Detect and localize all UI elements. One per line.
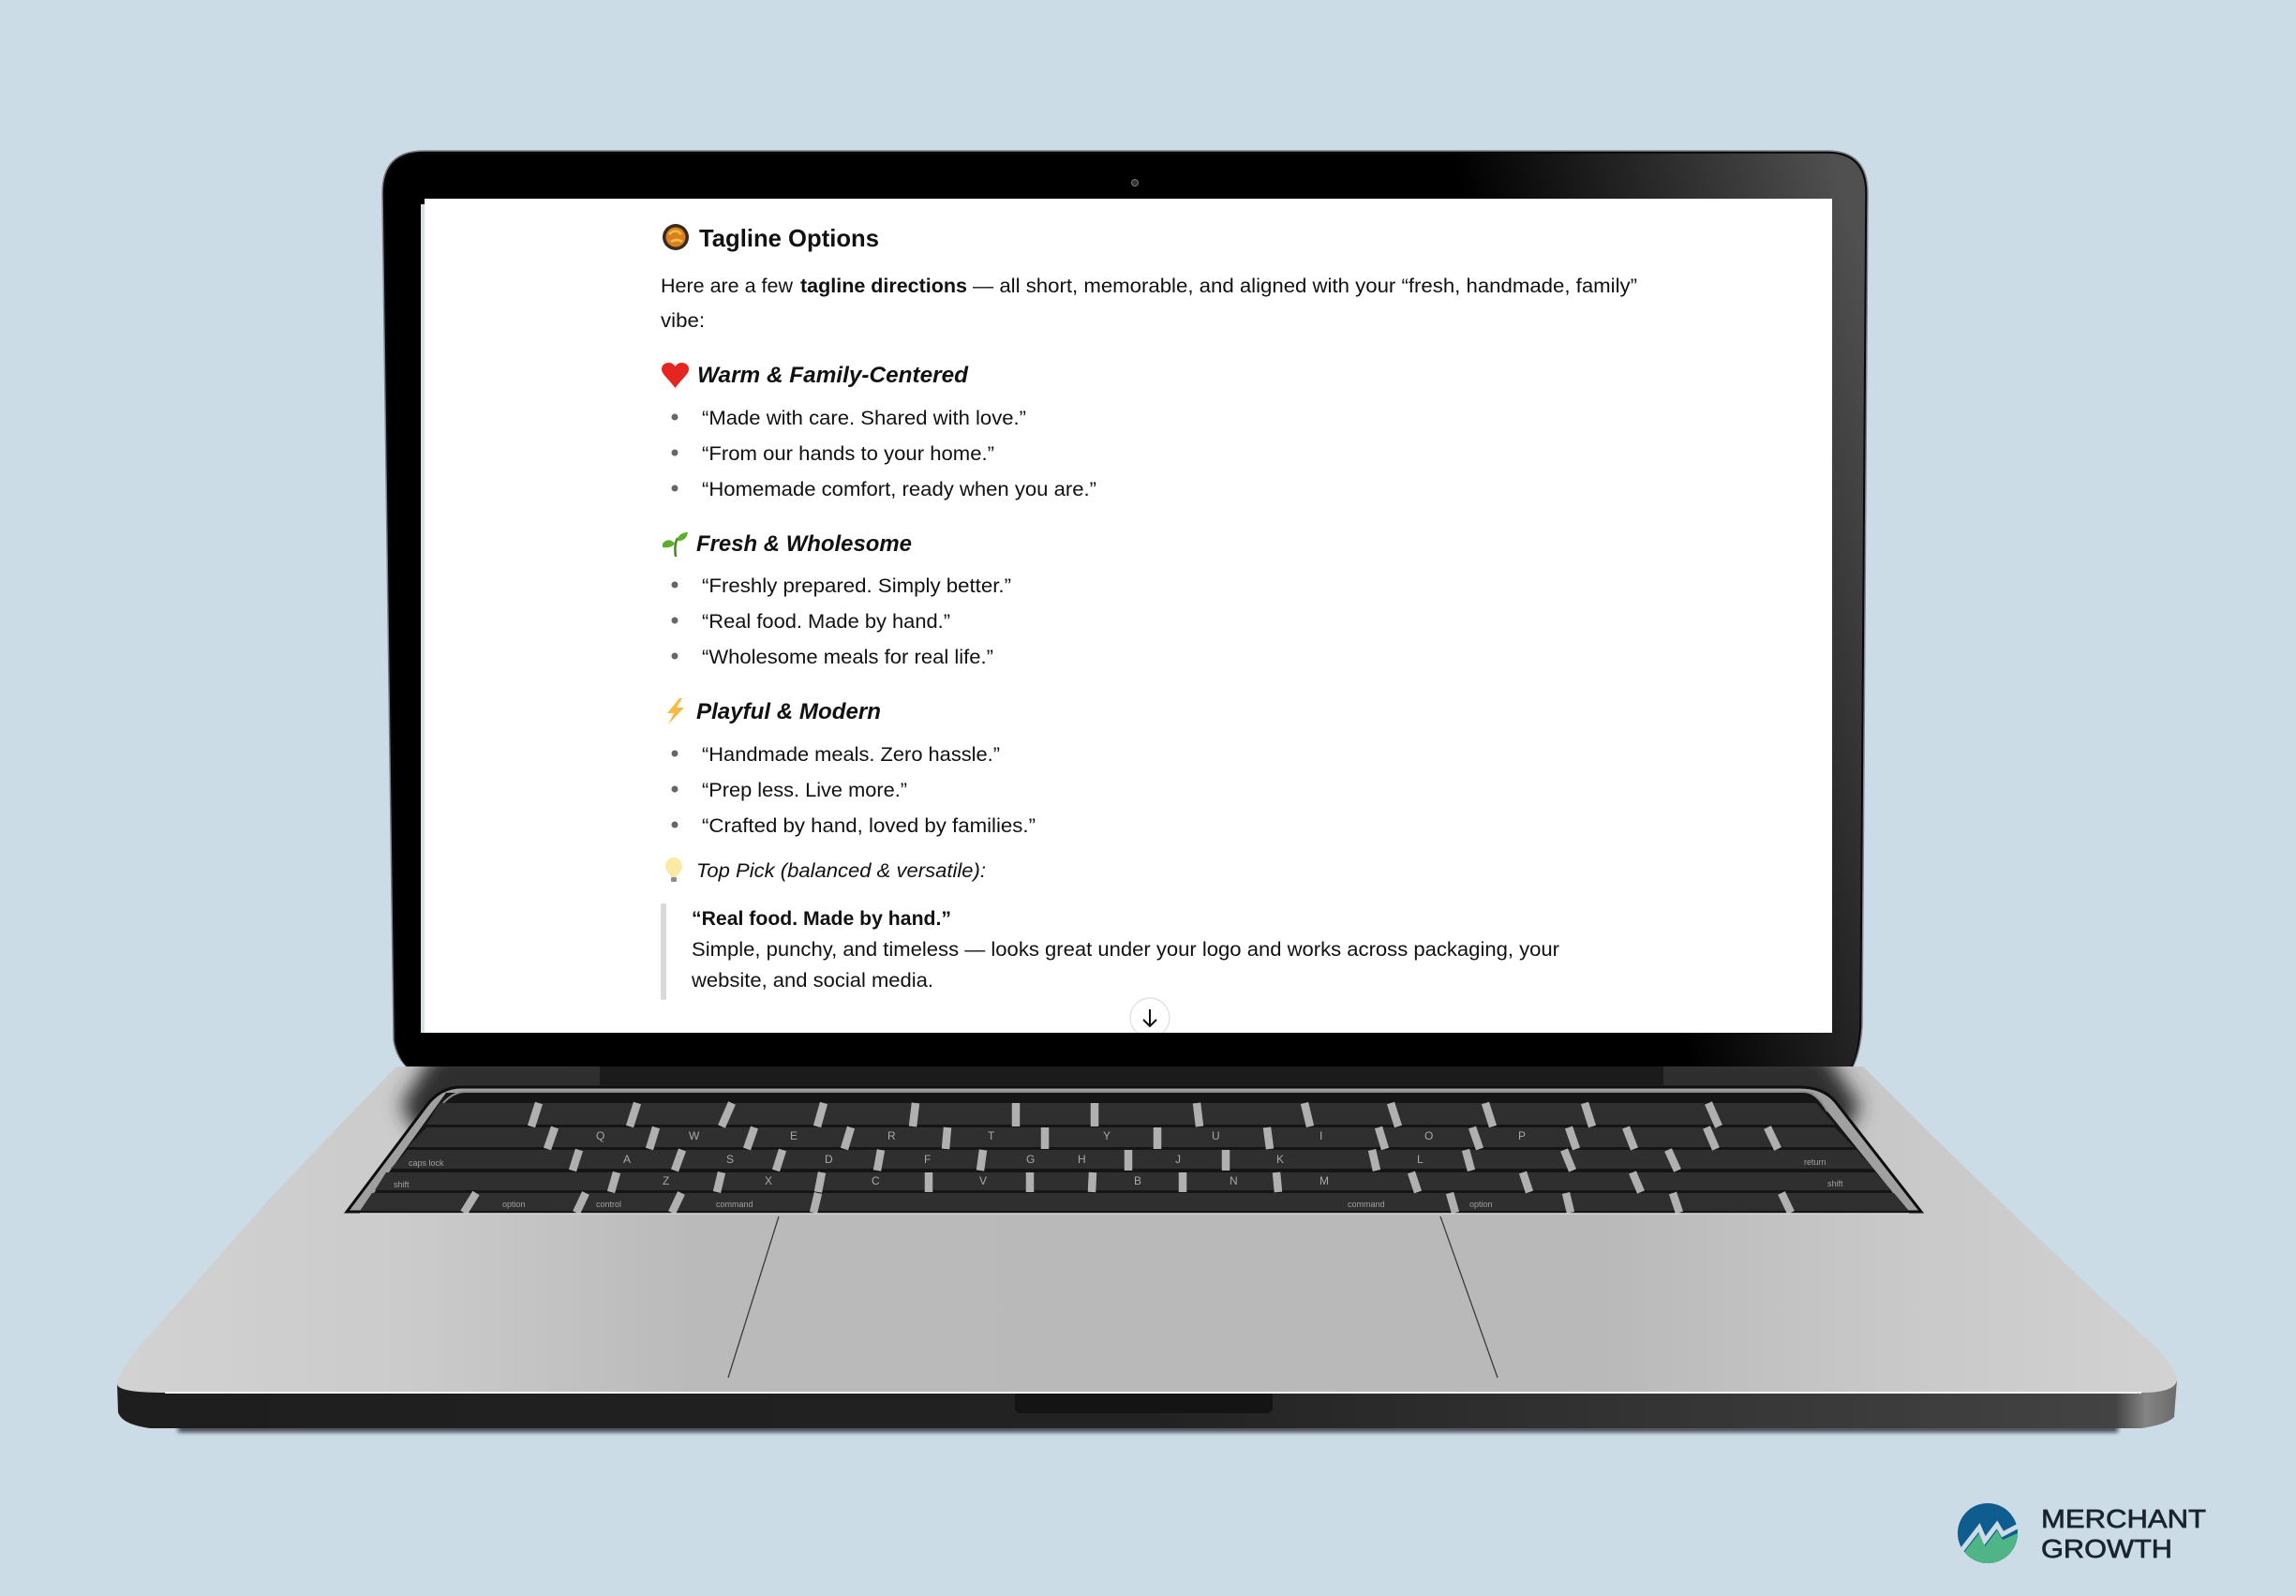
key legends: option (1469, 1200, 1493, 1209)
bullet list (671, 575, 1011, 668)
laptop base (117, 1050, 2177, 1428)
blockquote: top pick (661, 903, 1559, 1000)
key legends: N (1230, 1174, 1238, 1187)
camera (1132, 180, 1138, 186)
key legends: G (1026, 1153, 1035, 1166)
key legends: Z (663, 1174, 669, 1187)
icon: lightning bolt (667, 698, 684, 724)
laptop screen (421, 199, 1832, 1037)
icon: red heart (662, 363, 689, 388)
bullet list: “Made with care. Shared with love.” (702, 408, 1026, 429)
icon: light bulb (665, 858, 682, 882)
icon: seedling (663, 532, 688, 557)
key legends (394, 1129, 1843, 1209)
front notch (1015, 1391, 1273, 1413)
logo mark (1958, 1503, 2020, 1563)
key legends: H (1078, 1153, 1086, 1166)
hinge shadow on deck (389, 1066, 1872, 1136)
key legends: command (716, 1200, 753, 1209)
bullet list: “Freshly prepared. Simply better.” (702, 575, 1011, 597)
bullet list: “Wholesome meals for real life.” (702, 647, 993, 668)
logo: Merchant Growth (1958, 1503, 2206, 1563)
bullet list: “Real food. Made by hand.” (702, 611, 950, 633)
deck surface (117, 1066, 2177, 1393)
key legends: L (1417, 1153, 1424, 1166)
heading: Tagline Options: Tagline Options (699, 224, 879, 252)
key legends: M (1319, 1174, 1329, 1187)
key legends: control (596, 1200, 621, 1209)
key legends: R (887, 1129, 896, 1142)
intro paragraph (661, 276, 1637, 332)
key legends: Q (596, 1129, 604, 1142)
section: Fresh & Wholesome: Fresh & Wholesome (696, 531, 912, 557)
logo wordmark: MERCHANT (2041, 1504, 2206, 1533)
keyboard well (347, 1087, 1921, 1212)
bullet list: “Prep less. Live more.” (702, 780, 907, 801)
blockquote: top pick: website, and social media. (691, 970, 933, 992)
intro paragraph: tagline directions (800, 276, 967, 297)
key legends: X (765, 1174, 772, 1187)
bullet list (671, 744, 1036, 837)
key legends: W (689, 1129, 700, 1142)
key legends: P (1518, 1129, 1526, 1142)
key legends: V (979, 1174, 987, 1187)
blockquote: top pick: “Real food. Made by hand.” (692, 908, 951, 930)
key legends: T (988, 1129, 995, 1142)
bullet list: “From our hands to your home.” (702, 443, 994, 465)
key legends: S (726, 1153, 734, 1166)
intro paragraph: vibe: (661, 310, 705, 332)
key legends: A (623, 1153, 631, 1166)
logo wordmark: GROWTH (2041, 1534, 2172, 1563)
key legends: B (1134, 1174, 1141, 1187)
bullet list: “Homemade comfort, ready when you are.” (702, 479, 1096, 500)
front highlight (165, 1392, 2141, 1394)
key legends: caps lock (409, 1158, 444, 1168)
section: Warm & Family-Centered: Warm & Family-Centered (697, 363, 969, 388)
key legends: shift (394, 1180, 410, 1189)
key legends: D (825, 1153, 833, 1166)
front edge (117, 1380, 2177, 1428)
section: Playful & Modern (667, 698, 1036, 837)
bullet list: “Crafted by hand, loved by families.” (702, 815, 1036, 837)
key gaps (464, 1103, 1791, 1213)
shadow under laptop (178, 1426, 2118, 1432)
keyboard (347, 1087, 1921, 1213)
key legends: C (872, 1174, 880, 1187)
key legends: shift (1827, 1179, 1843, 1188)
key legends: K (1276, 1153, 1284, 1166)
intro paragraph: Here are a few (661, 276, 794, 297)
key legends: return (1804, 1157, 1826, 1167)
logo wordmark (2041, 1504, 2206, 1563)
icon: paella pan (663, 224, 689, 250)
key legends: U (1212, 1129, 1220, 1142)
trackpad edges (360, 1214, 1909, 1378)
section: Playful & Modern: Playful & Modern (696, 699, 881, 724)
key legends: E (790, 1129, 798, 1142)
top pick line: Top Pick (balanced & versatile): (696, 860, 986, 882)
blockquote: top pick: Simple, punchy, and timeless — looks great under your logo and works across packaging, your (692, 939, 1559, 961)
bullet list (671, 408, 1096, 500)
top light trim (433, 1092, 1827, 1117)
scroll down button (1130, 998, 1170, 1037)
key legends: command (1348, 1200, 1385, 1209)
key rows (360, 1103, 1909, 1211)
key legends: F (924, 1153, 931, 1166)
key legends: option (502, 1200, 526, 1209)
bullet list: “Handmade meals. Zero hassle.” (702, 744, 1000, 766)
section: Fresh & Wholesome (663, 531, 1011, 668)
key legends: I (1319, 1129, 1322, 1142)
key legends: Y (1103, 1129, 1111, 1142)
intro paragraph: — all short, memorable, and aligned with your “fresh, handmade, family” (973, 276, 1637, 297)
section: Warm & Family-Centered (662, 363, 1096, 500)
hinge band (600, 1066, 1663, 1085)
key legends: J (1175, 1153, 1181, 1166)
laptop lid and bezel (382, 151, 1868, 1068)
key legends: O (1424, 1129, 1433, 1142)
